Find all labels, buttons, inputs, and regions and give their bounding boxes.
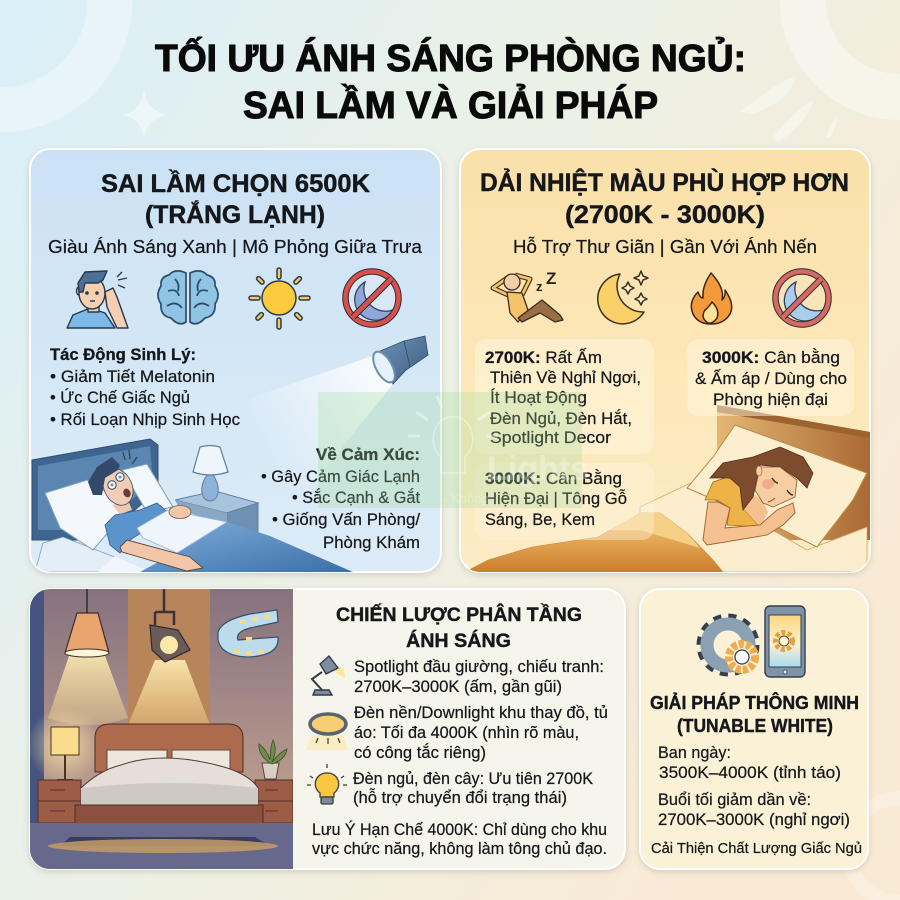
icon: brain [158, 271, 218, 324]
panel: tunable white [640, 589, 868, 869]
card: 3000K lower: Sáng, Be, Kem [485, 510, 595, 529]
illustration: layered bedroom [27, 589, 293, 869]
icon: moon and stars [598, 271, 648, 324]
text: spotlight [354, 658, 604, 696]
icon: man with headache [67, 271, 128, 328]
heading: warm range: DẢI NHIỆT MÀU PHÙ HỢP HƠN [480, 167, 849, 197]
panel: dải nhiệt màu phù hợp [460, 149, 870, 572]
card: 2700K: Ít Hoạt Động [490, 388, 587, 407]
card: 3000K top right [687, 339, 854, 416]
text: 4000K note [312, 820, 607, 858]
text: spotlight: 2700K–3000K (ấm, gần gũi) [354, 678, 562, 696]
text: 4000K note: vực chức năng, không làm tông chủ đạo. [312, 840, 607, 858]
card: 3000K top right: Phòng hiện đại [713, 390, 828, 409]
heading: tunable white: GIẢI PHÁP THÔNG MINH [650, 692, 859, 713]
watermark: Lights [487, 450, 589, 488]
text: tác động sinh lý [50, 345, 240, 429]
watermark: - Không [443, 491, 489, 506]
heading: layers: CHIẾN LƯỢC PHÂN TẦNG [336, 602, 582, 626]
icon: relaxing person [493, 269, 563, 322]
icon: phone [765, 606, 805, 677]
heading: 6500K [101, 169, 370, 229]
title: SAI LẦM VÀ GIẢI PHÁP [243, 83, 658, 127]
card: 3000K top right: 3000K: Cân bằng [702, 348, 840, 367]
panel: chiến lược phân tầng [27, 589, 625, 869]
card: 3000K lower [475, 463, 654, 540]
card: 2700K: Thiên Về Nghỉ Ngơi, [490, 368, 641, 387]
text: daytime: Ban ngày: [658, 744, 731, 762]
text: tác động sinh lý: Tác Động Sinh Lý: [50, 345, 196, 364]
title [155, 35, 746, 127]
text: night lamp: Đèn ngủ, đèn cây: Ưu tiên 2700K [353, 770, 593, 788]
heading: tunable white [650, 692, 859, 736]
text: 4000K note: Lưu Ý Hạn Chế 4000K: Chỉ dùng cho khu [312, 820, 607, 839]
text: daytime [658, 744, 841, 782]
icon: no moon [344, 270, 400, 326]
subtitle: 6500K: Giàu Ánh Sáng Xanh | Mô Phỏng Giữa Trưa [48, 236, 423, 257]
text: spotlight: Spotlight đầu giường, chiếu tranh: [354, 658, 604, 676]
icon: relaxing person: Z [546, 269, 556, 288]
heading: warm range: (2700K - 3000K) [565, 201, 765, 229]
icon: desk lamp [312, 656, 345, 695]
card: 2700K: Spotlight Decor [490, 428, 611, 447]
text: daytime: 3500K–4000K (tỉnh táo) [659, 764, 841, 782]
icon: flame [691, 273, 732, 324]
card: 3000K lower: 3000K: Cân Bằng [485, 469, 622, 488]
icon: relaxing person: z [536, 279, 543, 294]
illustration: flashlight beam [266, 336, 428, 464]
icon: ring downlight [306, 714, 348, 750]
panel: sai lầm 6500K [30, 149, 441, 572]
text: evening [658, 791, 850, 829]
text: evening: 2700K–3000K (nghỉ ngơi) [658, 811, 850, 829]
icon: LED strip [218, 610, 278, 657]
card: 2700K [475, 339, 654, 454]
card: 2700K: 2700K: Rất Ấm [485, 348, 602, 367]
heading: layers [336, 602, 582, 652]
heading: layers: ÁNH SÁNG [406, 629, 511, 652]
watermark [318, 392, 589, 508]
text: về cảm xúc: • Giống Vấn Phòng/ [272, 510, 420, 529]
card: 3000K lower: Hiện Đại | Tông Gỗ [485, 489, 627, 508]
text: downlight: Đèn nền/Downlight khu thay đồ, tủ [354, 704, 608, 722]
icon: sun [249, 268, 310, 329]
text: night lamp [353, 770, 593, 807]
text: downlight: áo: Tối đa 4000K (nhìn rõ màu, [354, 724, 579, 742]
icon: light bulb [307, 764, 347, 804]
icon: gears [703, 620, 758, 673]
text: về cảm xúc [261, 445, 420, 552]
text: evening: Buổi tối giảm dần về: [658, 791, 811, 809]
heading: warm range [480, 167, 849, 229]
heading: tunable white: (TUNABLE WHITE) [677, 715, 833, 736]
text: về cảm xúc: • Gây Cảm Giác Lạnh [261, 467, 420, 486]
text: về cảm xúc: • Sắc Cạnh & Gắt [292, 488, 420, 507]
icon: no moon warm [774, 270, 830, 326]
heading: 6500K: (TRẮNG LẠNH) [145, 199, 325, 229]
card: 3000K top right: & Ấm áp / Dùng cho [695, 369, 847, 388]
text: tác động sinh lý: • Rối Loạn Nhịp Sinh Học [50, 410, 240, 429]
subtitle: warm range: Hỗ Trợ Thư Giãn | Gần Với Ánh Nến [513, 236, 817, 257]
illustration: man awake in bed [32, 439, 353, 572]
text: night lamp: (hỗ trợ chuyển đổi trạng thái) [353, 788, 567, 807]
text: về cảm xúc: Về Cảm Xúc: [316, 445, 420, 464]
text: về cảm xúc: Phòng Khám [323, 533, 420, 552]
text: tác động sinh lý: • Giảm Tiết Melatonin [50, 367, 215, 386]
text: downlight [354, 704, 608, 762]
text: sleep quality: Cải Thiện Chất Lượng Giấc Ngủ [651, 840, 862, 857]
illustration: woman sleeping [465, 405, 870, 572]
text: downlight: có công tắc riêng) [354, 743, 486, 762]
title: TỐI ƯU ÁNH SÁNG PHÒNG NGỦ: [155, 35, 746, 80]
heading: 6500K: SAI LẦM CHỌN 6500K [101, 169, 370, 198]
text: tác động sinh lý: • Ức Chế Giấc Ngủ [50, 388, 190, 407]
card: 2700K: Đèn Ngủ, Đèn Hắt, [490, 409, 632, 428]
